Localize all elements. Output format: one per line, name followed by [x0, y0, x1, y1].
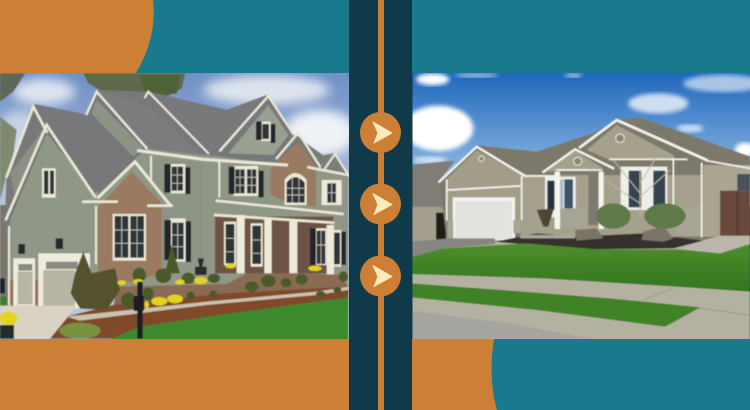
- columns: [555, 172, 604, 229]
- large window: [621, 167, 667, 210]
- porch columns: [237, 215, 334, 274]
- arrow badge 1: [360, 112, 401, 153]
- sidewalk joints: [643, 288, 750, 325]
- gravel: [680, 236, 750, 253]
- main lawn: [410, 243, 750, 292]
- boulders: [575, 226, 673, 242]
- stone base: [447, 207, 701, 238]
- top band: orange shape: [0, 0, 154, 73]
- stone walls: [98, 172, 162, 282]
- vents: [479, 134, 624, 165]
- planter wall and path: [113, 273, 348, 308]
- garage doors: [13, 253, 90, 308]
- window glazing bars: [115, 167, 336, 264]
- mulch bed: [495, 233, 703, 249]
- driveway: [410, 238, 495, 257]
- arrow badge 2: [360, 184, 401, 224]
- main walls: [447, 150, 522, 220]
- trim lines: [6, 92, 348, 305]
- upper gable wall: [587, 125, 673, 160]
- lawn: [108, 297, 348, 340]
- left upper gable: [10, 132, 42, 194]
- shrubs: [596, 203, 686, 229]
- photo: single-storey house: [403, 73, 750, 340]
- main roof mass: [439, 117, 750, 240]
- clouds: [403, 73, 750, 163]
- shrubs: [59, 245, 348, 339]
- arrow badge 3: [360, 256, 401, 296]
- planter pot: [0, 325, 14, 339]
- road: [410, 311, 590, 339]
- garden path: [67, 287, 348, 321]
- porch gable: [547, 151, 603, 172]
- shutters: [164, 121, 346, 265]
- mailbox: [134, 282, 144, 339]
- centre divider: orange line: [378, 0, 384, 410]
- left gable trim and eave lines: [439, 120, 750, 237]
- sky: [0, 73, 350, 340]
- top band: teal: [130, 0, 750, 73]
- bottom band: teal shape: [492, 339, 750, 410]
- yellow flowers: [0, 264, 322, 325]
- bare tree: [605, 157, 670, 217]
- windows: [42, 122, 342, 267]
- neighbouring house: [410, 161, 455, 207]
- ground and far wall: [0, 205, 13, 307]
- fountain: [195, 258, 207, 275]
- ground base: [410, 240, 750, 340]
- front door: [588, 172, 598, 225]
- sky: [410, 73, 750, 206]
- trees: [83, 73, 185, 98]
- roofs: [34, 104, 137, 195]
- porch window: [545, 177, 576, 217]
- driveway: [0, 306, 77, 339]
- wall lamps: [18, 238, 63, 254]
- photo: large two-storey house: [0, 73, 357, 340]
- house backing mass: [5, 90, 348, 293]
- fence: [720, 191, 750, 236]
- walk step: [520, 235, 575, 238]
- mulch: [50, 287, 348, 339]
- garage door: [453, 197, 515, 240]
- grass strip: [410, 283, 700, 327]
- main upper walls: [10, 133, 348, 290]
- bottom band: orange: [0, 339, 502, 410]
- centre divider: dark column: [349, 0, 412, 410]
- side window: [737, 174, 750, 191]
